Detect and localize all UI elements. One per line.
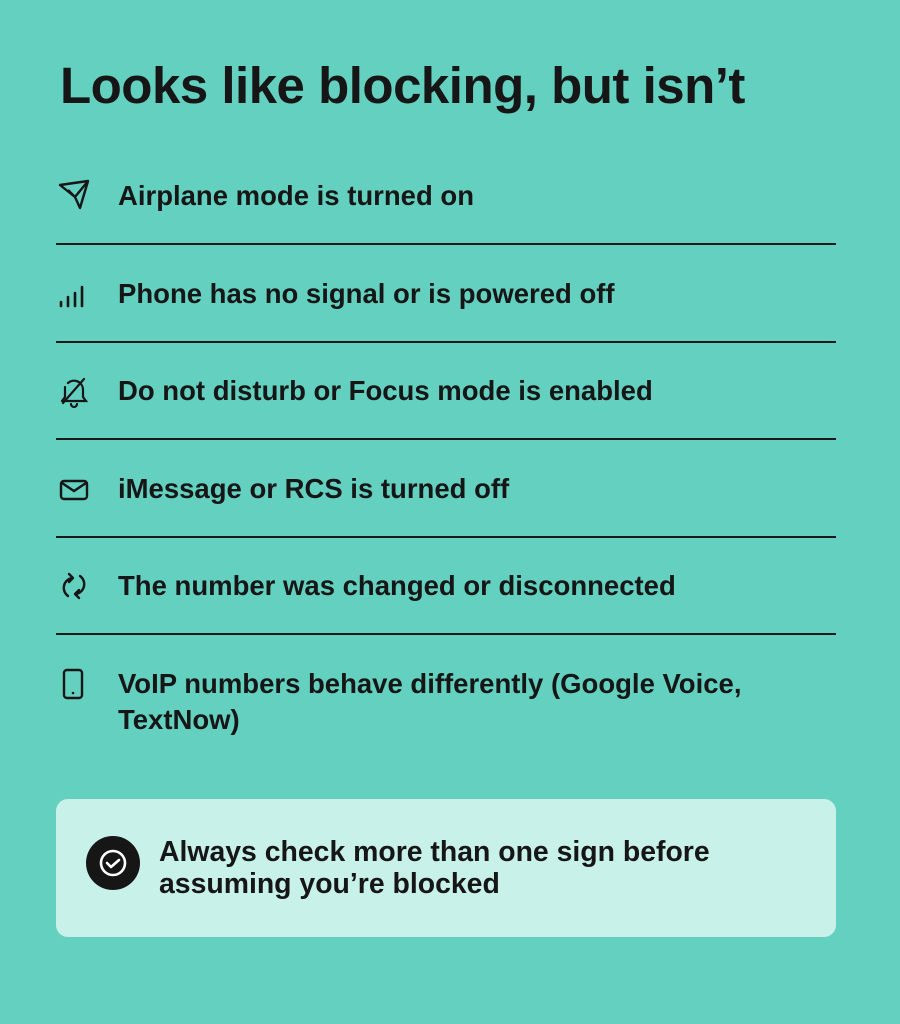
icon: bell off (60, 378, 88, 408)
row: number changed: The number was changed or disconnected (118, 570, 676, 601)
callout: assuming you’re blocked (159, 868, 500, 900)
icon: signal bars (60, 286, 84, 308)
icon: paper plane (58, 180, 90, 210)
row: airplane mode: Airplane mode is turned on (118, 180, 474, 211)
row: VoIP (62, 668, 741, 735)
row: no signal: Phone has no signal or is powered off (118, 278, 615, 309)
icon: phone (62, 668, 84, 700)
icon: check circle (86, 836, 140, 890)
icon: envelope (60, 480, 88, 500)
icon: refresh (62, 572, 86, 600)
row: do not disturb: Do not disturb or Focus mode is enabled (118, 375, 653, 406)
callout (56, 799, 836, 937)
row: VoIP: TextNow) (118, 704, 240, 735)
callout: Always check more than one sign before (159, 836, 710, 868)
row: VoIP: VoIP numbers behave differently (Google Voice, (118, 668, 741, 699)
row: iMessage: iMessage or RCS is turned off (118, 473, 509, 504)
title: Looks like blocking, but isn’t (60, 57, 745, 114)
